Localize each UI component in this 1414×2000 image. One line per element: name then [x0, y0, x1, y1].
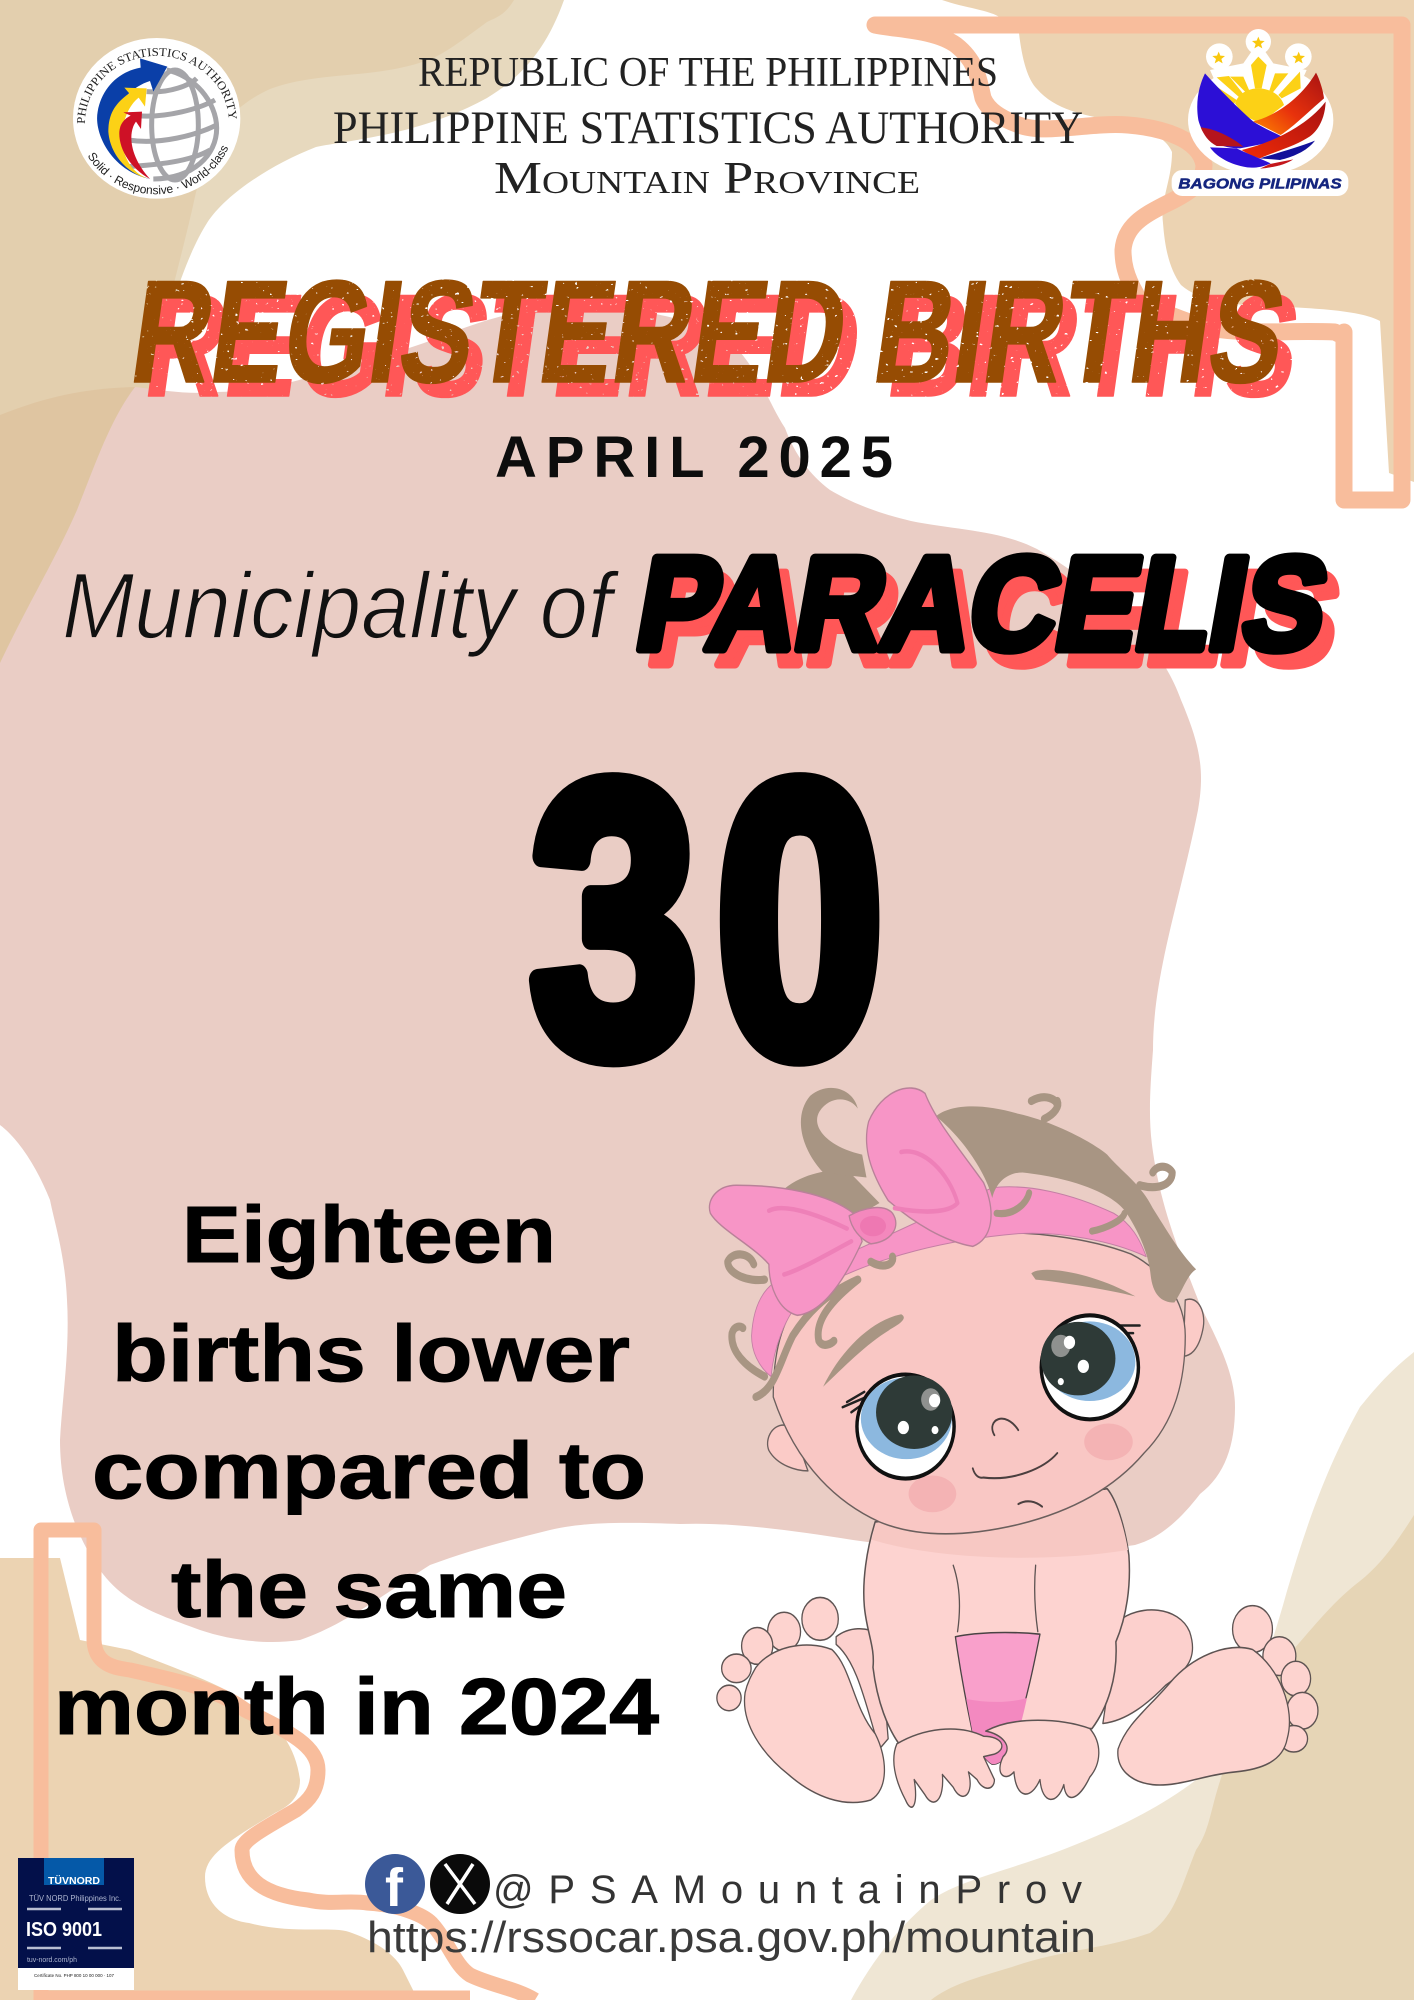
baby body [864, 1489, 1129, 1744]
logo: Philippine Statistics Authority [73, 38, 240, 199]
emblem sun [1217, 57, 1301, 123]
background: top-right beige shape [942, 0, 1414, 482]
decorative line: top right [875, 25, 1402, 500]
ISO certification badge: tuv-nord.com/ph [27, 1957, 77, 1964]
logo: Bagong Pilipinas [1172, 29, 1348, 196]
header text: PHILIPPINE STATISTICS AUTHORITY [333, 102, 1083, 154]
header text: Mountain Province [494, 152, 920, 203]
emblem stars [1212, 37, 1305, 63]
baby head [773, 1232, 1185, 1534]
emblem red band [1253, 73, 1324, 135]
comparison text: Eighteen [182, 1190, 556, 1279]
website url: https://rssocar.psa.gov.ph/mountain [367, 1913, 1096, 1962]
municipality name: PARACELIS [627, 531, 1339, 678]
background: bottom-left beige shape [0, 1558, 418, 2000]
comparison text: month in 2024 [54, 1662, 660, 1751]
logo arrows [97, 58, 167, 179]
header text [333, 50, 1083, 203]
ISO certification badge: TÜVNORD [48, 1874, 100, 1887]
ISO certification badge: TÜV NORD Philippines Inc. [29, 1894, 121, 1903]
baby hands [894, 1720, 1099, 1807]
baby curls [728, 1097, 1172, 1397]
municipality label: Municipality of [62, 553, 620, 658]
comparison text: births lower [112, 1309, 630, 1398]
badge label: BAGONG PILIPINAS [1178, 176, 1342, 192]
ISO certification badge [18, 1858, 134, 1990]
baby arm lines [953, 1565, 1038, 1632]
subtitle: date: APRIL 2025 [495, 425, 893, 490]
baby hair right [936, 1106, 1196, 1303]
baby hair curl top [801, 1088, 866, 1178]
social handle: @PSAMountainProv [493, 1868, 1082, 1912]
emblem lower bands [1242, 102, 1326, 158]
icon: facebook: f [385, 1858, 404, 1918]
baby headband [752, 1187, 1146, 1377]
baby body shade [872, 1490, 1128, 1558]
logo globe [127, 70, 217, 180]
decorative line: bottom left [41, 1530, 535, 2000]
baby bow [709, 1088, 991, 1315]
background: large pink blob [0, 307, 1235, 1642]
baby cheeks [909, 1476, 956, 1512]
emblem blue band [1197, 73, 1287, 148]
emblem outline [1172, 29, 1348, 196]
baby thighs [836, 1610, 1193, 1749]
icon: facebook [365, 1854, 425, 1918]
big number: 30 [531, 705, 883, 1135]
comparison text: compared to [92, 1426, 646, 1515]
icon: X [430, 1854, 490, 1914]
baby hair left [780, 1167, 880, 1218]
logo: Philippine Statistics Authority: Solid · Responsive · World-class [88, 146, 228, 194]
ISO certification badge: ISO 9001 [26, 1919, 102, 1941]
municipality name: PARACELIS [639, 546, 1351, 693]
background: top-left beige shapes [0, 0, 564, 700]
background: bottom-right beige shapes [851, 1352, 1414, 2000]
comparison text: the same [171, 1545, 567, 1634]
header text: REPUBLIC OF THE PHILIPPINES [418, 50, 998, 96]
comparison text [54, 1190, 660, 1751]
ISO certification badge: Certificate No. PHP 800 10 00 000 · 107 [34, 1973, 114, 1978]
baby eyebrows [823, 1314, 904, 1387]
baby left eye [843, 1374, 954, 1479]
logo ring text: PHILIPPINE STATISTICS AUTHORITY [77, 48, 237, 124]
baby right eye [1041, 1315, 1140, 1419]
baby nose and mouth [973, 1419, 1057, 1507]
baby illustration [709, 1088, 1318, 1807]
baby diaper [955, 1633, 1040, 1764]
baby left foot [717, 1597, 884, 1803]
baby right foot [1118, 1606, 1318, 1785]
baby ears [768, 1299, 1204, 1471]
